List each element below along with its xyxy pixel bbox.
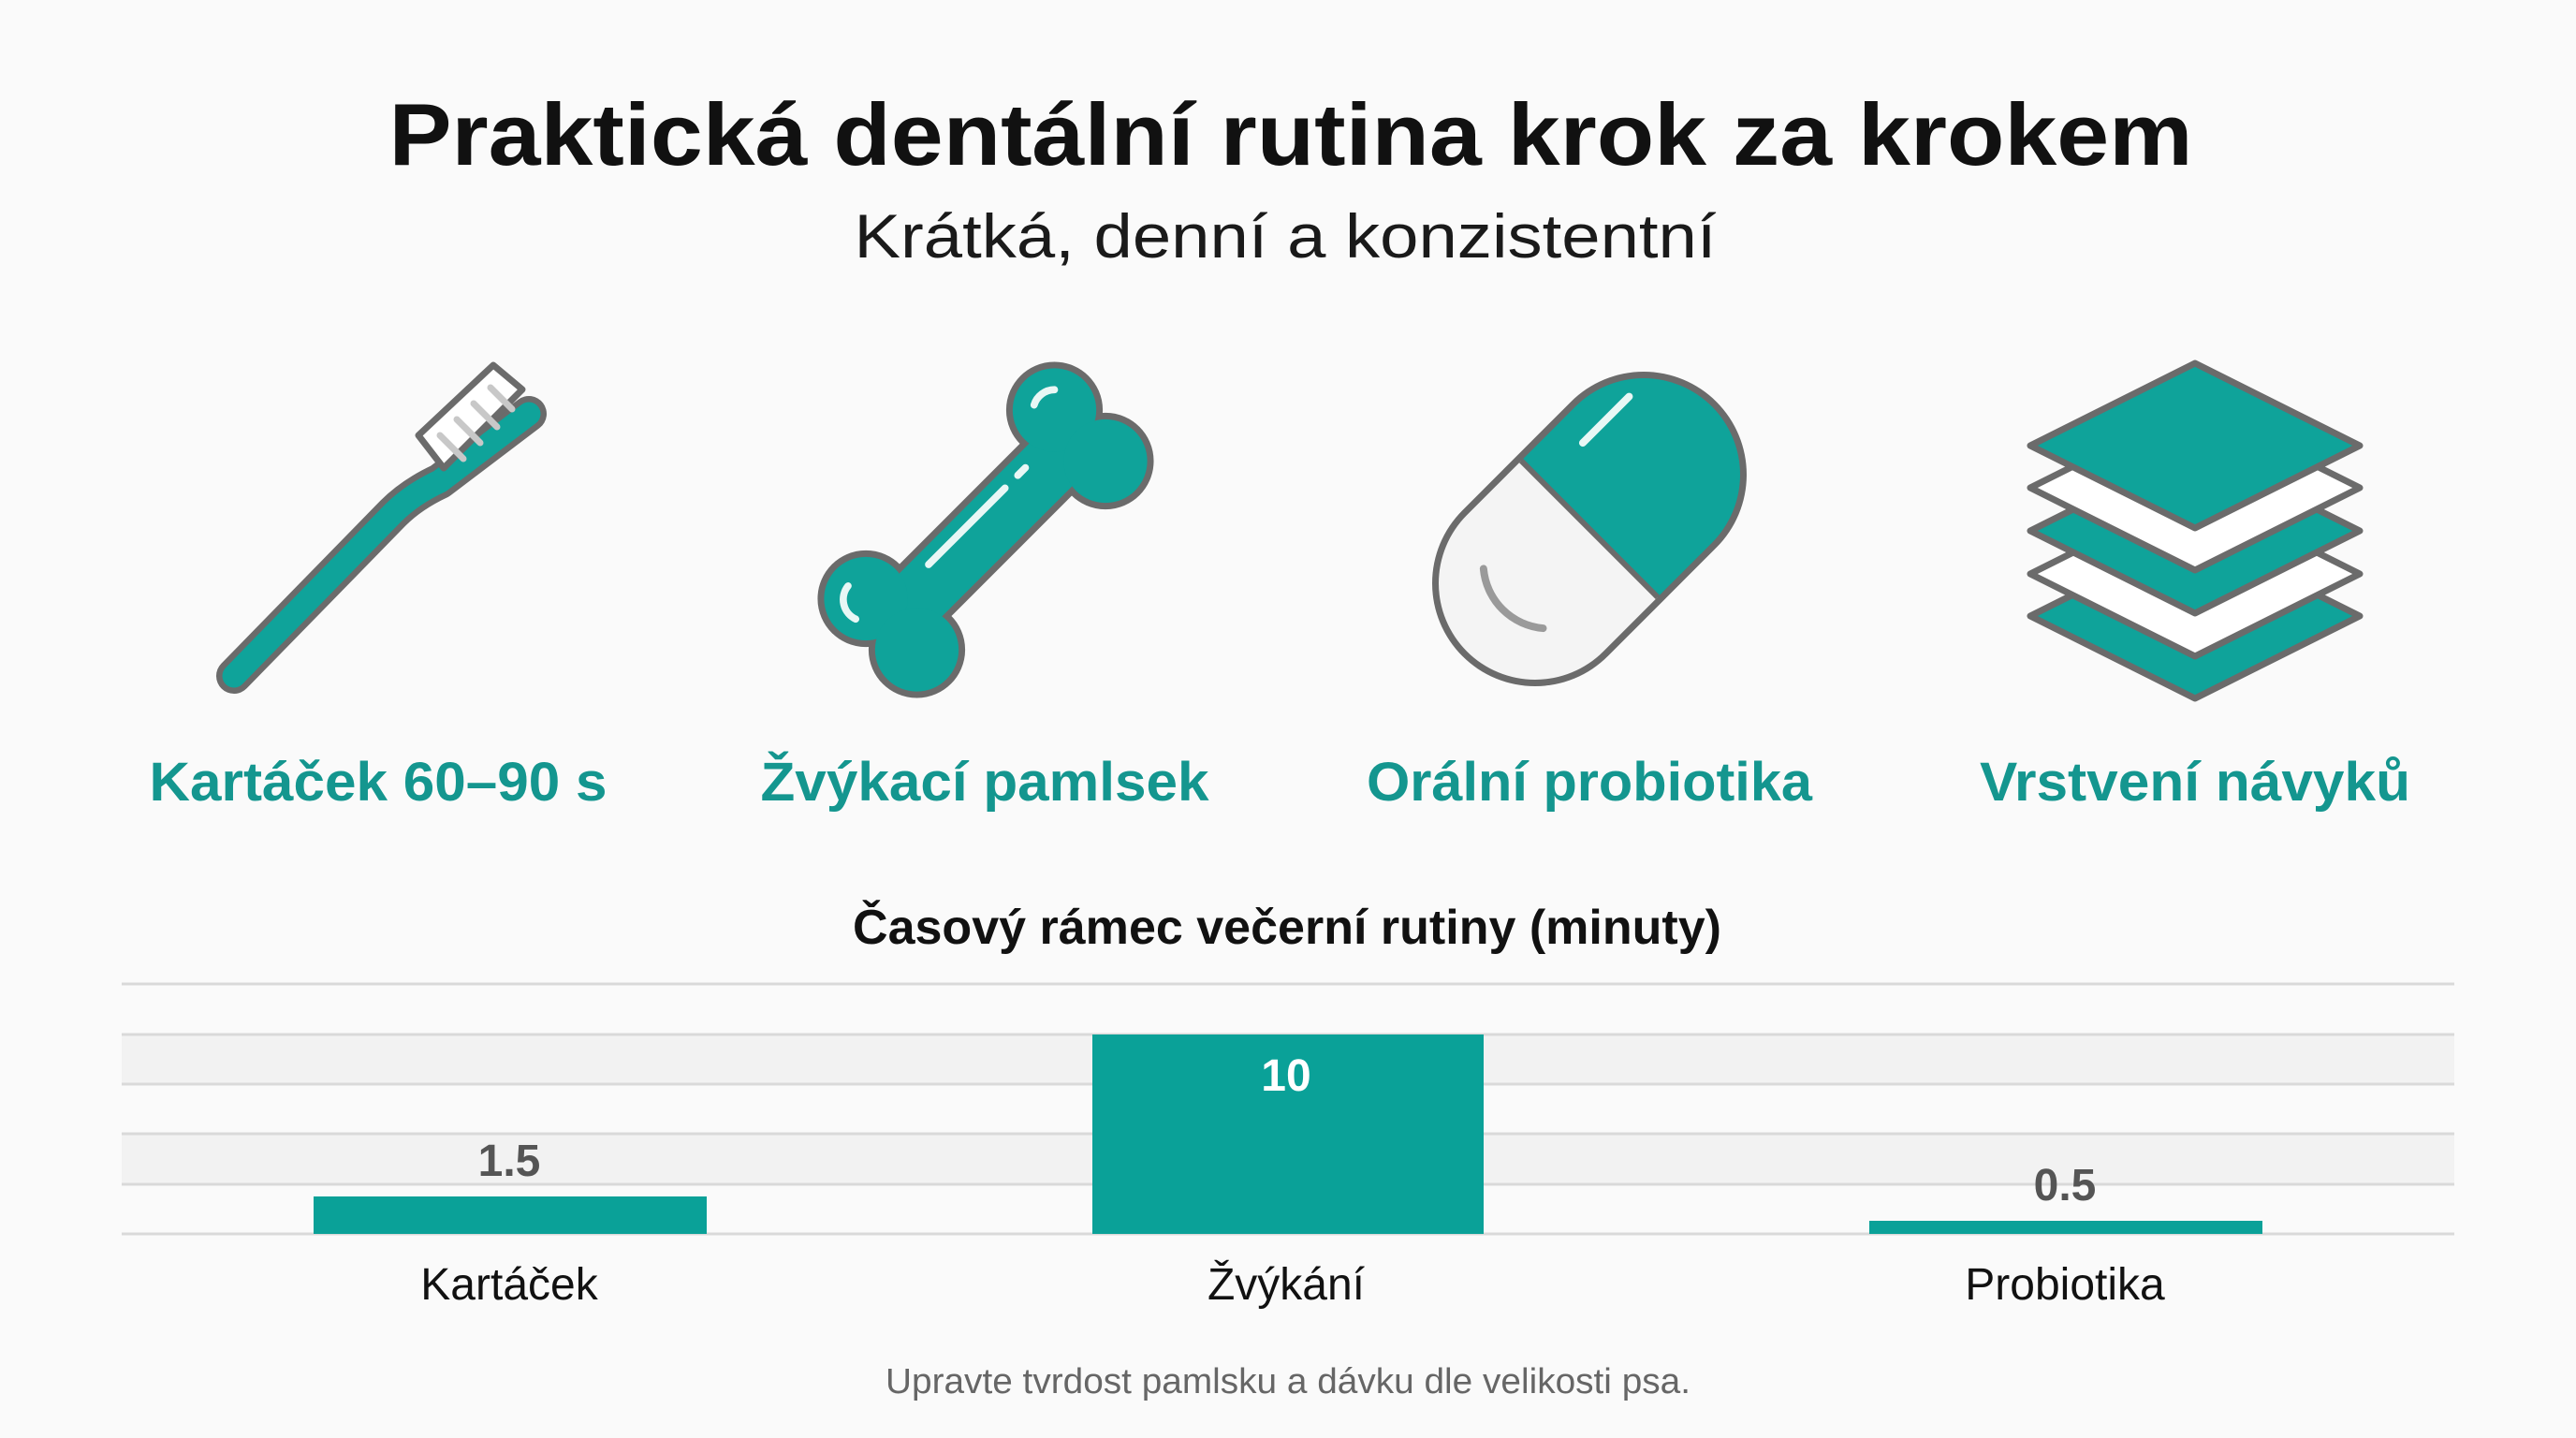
footer note: Upravte tvrdost pamlsku a dávku dle velikosti psa. — [886, 1362, 1690, 1401]
label: habit stacking: Vrstvení návyků — [1980, 752, 2410, 813]
label: chew treat: Žvýkací pamlsek — [760, 752, 1209, 813]
title: Praktická dentální rutina krok za krokem — [389, 85, 2192, 183]
bar: Žvýkání — [1092, 1034, 1484, 1234]
subtitle: Krátká, denní a konzistentní — [854, 201, 1717, 271]
icon: capsule — [1389, 329, 1790, 729]
chart title: Časový rámec večerní rutiny (minuty) — [853, 900, 1721, 955]
icon: layered stack — [2030, 363, 2360, 698]
bar: Kartáček — [314, 1196, 707, 1234]
value 1.5: 1.5 — [478, 1137, 540, 1186]
label: brushing: Kartáček 60–90 s — [150, 752, 607, 813]
axis label Kartáček: Kartáček — [420, 1260, 599, 1310]
axis label Žvýkání: Žvýkání — [1208, 1260, 1366, 1310]
bar chart — [122, 984, 2454, 1310]
icon: toothbrush — [234, 365, 529, 676]
axis label Probiotika: Probiotika — [1965, 1260, 2165, 1310]
bar: Probiotika — [1869, 1221, 2262, 1234]
icon: bone — [807, 351, 1164, 709]
label: probiotics: Orální probiotika — [1367, 752, 1813, 813]
value 10: 10 — [1261, 1051, 1311, 1101]
value 0.5: 0.5 — [2034, 1161, 2096, 1211]
